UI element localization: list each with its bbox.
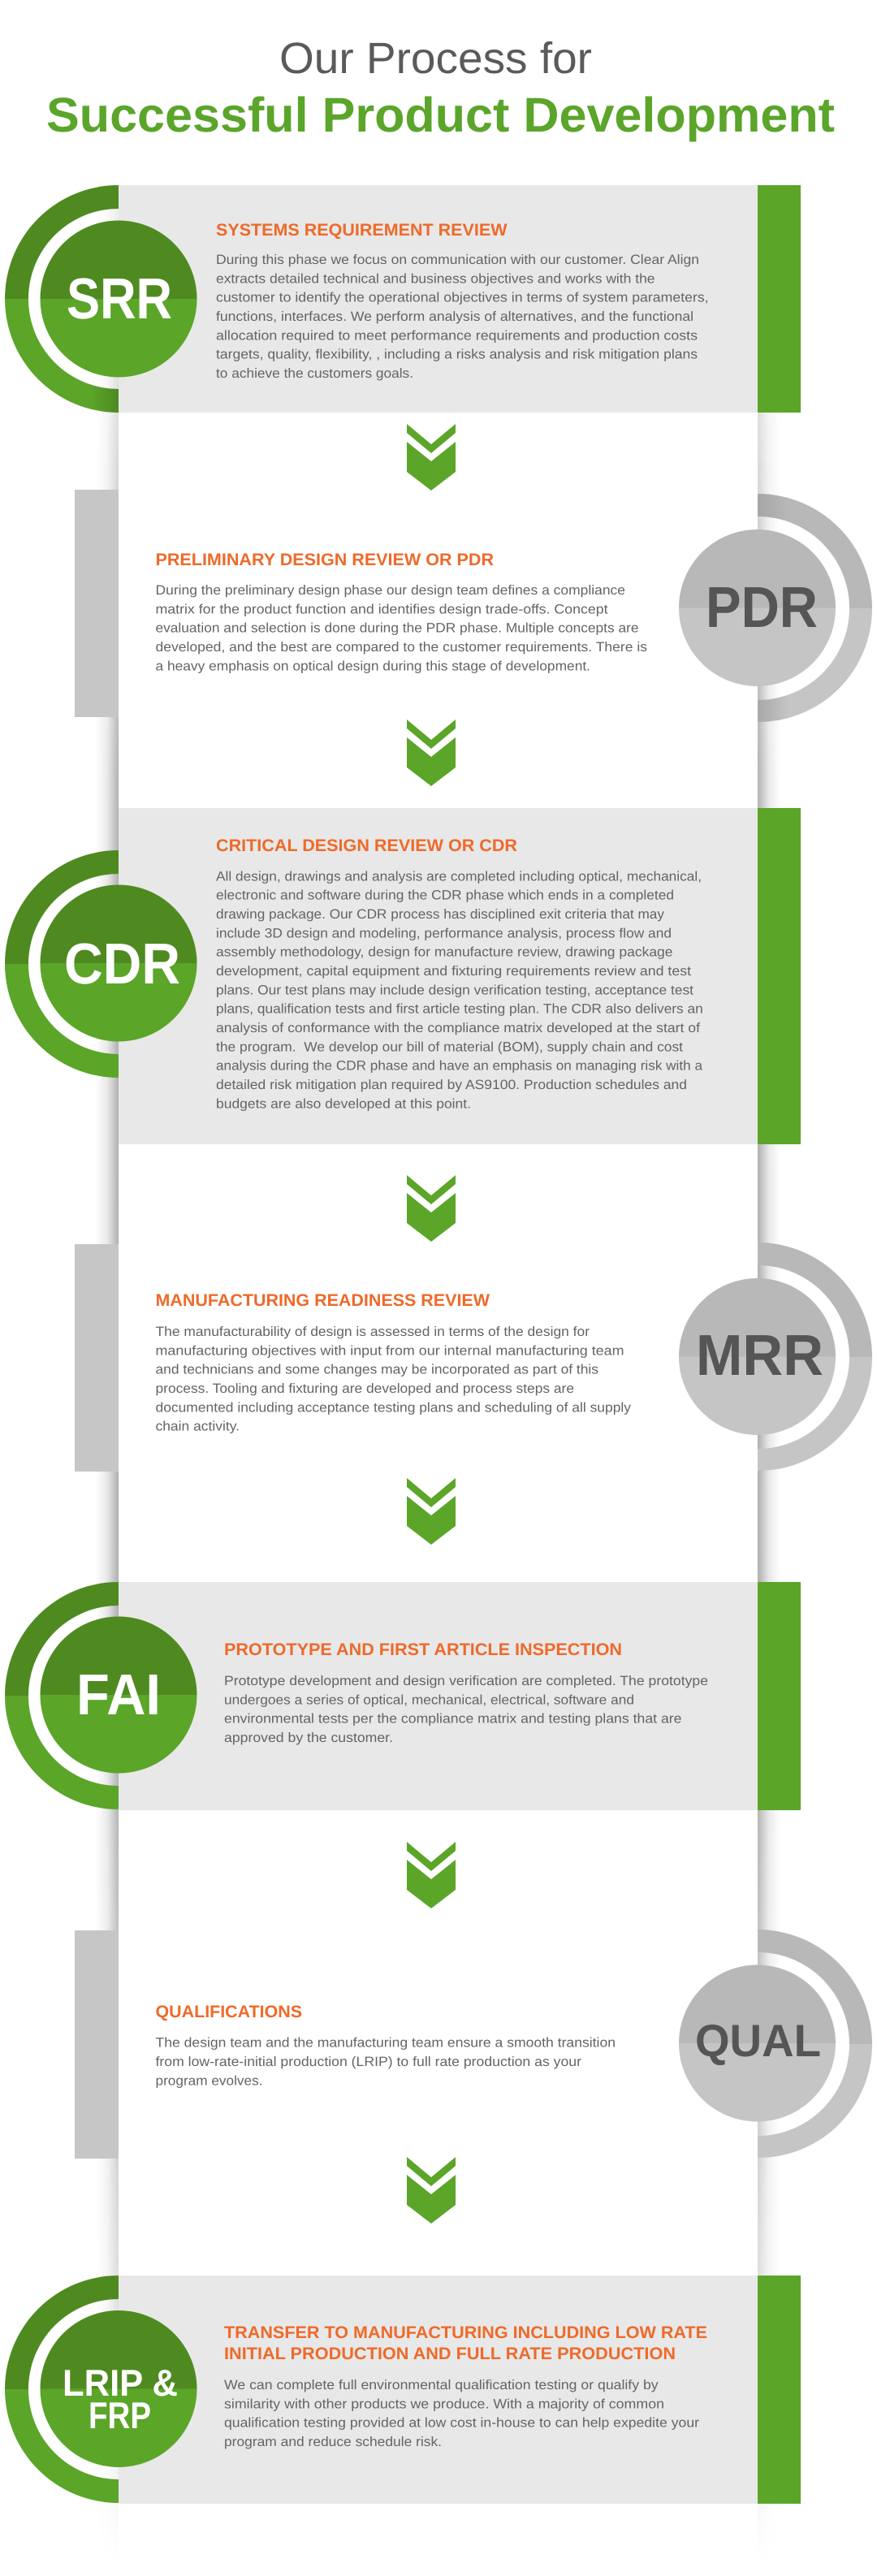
heading: PROTOTYPE AND FIRST ARTICLE INSPECTION (224, 1640, 622, 1659)
arrow: QUAL to LRIP and FRP (407, 2157, 456, 2224)
body text: Prototype development and design verification are completed. The prototype (224, 1674, 708, 1688)
body text: All design, drawings and analysis are completed including optical, mechanical, (216, 869, 702, 884)
body text: allocation required to meet performance requirements and production costs (216, 328, 698, 343)
body text: budgets are also developed at this point. (216, 1096, 471, 1111)
body text: include 3D design and modeling, performance analysis, process flow and (216, 926, 672, 940)
body text: evaluation and selection is done during the PDR phase. Multiple concepts are (156, 621, 638, 636)
body text (216, 869, 703, 1111)
body text: During this phase we focus on communication with our customer. Clear Align (216, 253, 699, 267)
body text (216, 253, 709, 381)
panel: critical design review (41, 808, 801, 1144)
badge: QUAL: QUAL (695, 2015, 821, 2066)
ring: MRR (758, 1243, 872, 1471)
title line: Successful Product Development: Successful Product Development (46, 88, 835, 142)
body text: program evolves. (156, 2073, 263, 2088)
body text: to achieve the customers goals. (216, 366, 413, 381)
body text: extracts detailed technical and business objectives and works with the (216, 271, 655, 286)
badge: LRIP and FRP: FRP (89, 2394, 151, 2436)
heading: PRELIMINARY DESIGN REVIEW OR PDR (156, 551, 494, 569)
ring: CDR (5, 850, 119, 1078)
panel: systems requirement review (41, 185, 801, 413)
accent bar (758, 185, 801, 413)
accent bar (758, 2276, 801, 2504)
body text: analysis during the CDR phase and have an emphasis on managing risk with a (216, 1059, 703, 1074)
body text: process. Tooling and fixturing are developed and process steps are (156, 1381, 574, 1396)
body text: qualification testing provided at low cost in-house to can help expedite your (224, 2416, 700, 2431)
body text: undergoes a series of optical, mechanical, electrical, software and (224, 1692, 634, 1707)
body text (156, 2036, 616, 2088)
body text: plans. Our test plans may include design verification testing, acceptance test (216, 983, 693, 997)
body text: and technicians and some changes may be incorporated as part of this (156, 1363, 598, 1377)
body text: development, capital equipment and fixturing requirements review and test (216, 964, 691, 979)
ring: LRIP and FRP (5, 2276, 119, 2503)
badge: PDR: PDR (706, 576, 818, 640)
heading: MANUFACTURING READINESS REVIEW (156, 1291, 490, 1310)
badge: CDR: CDR (64, 932, 180, 996)
body text: developed, and the best are compared to the customer requirements. There is (156, 640, 647, 655)
accent bar (758, 1582, 801, 1810)
body text: matrix for the product function and identifies design trade-offs. Concept (156, 602, 608, 616)
body text: During the preliminary design phase our design team defines a compliance (156, 583, 625, 598)
panel background (119, 1582, 758, 1810)
body text: documented including acceptance testing plans and scheduling of all supply (156, 1400, 632, 1415)
badge: MRR (679, 1278, 836, 1435)
panel background (119, 2276, 758, 2504)
body text (224, 1674, 708, 1745)
ring: PDR (758, 494, 872, 722)
heading: TRANSFER TO MANUFACTURING INCLUDING LOW RATE (224, 2323, 707, 2342)
body text: targets, quality, flexibility, , including a risks analysis and risk mitigation plans (216, 348, 698, 362)
heading: QUALIFICATIONS (156, 2003, 302, 2021)
body text (156, 583, 647, 673)
body text: detailed risk mitigation plan required by AS9100. Production schedules and (216, 1078, 687, 1092)
body text: customer to identify the operational objectives in terms of system parameters, (216, 291, 709, 305)
body text (156, 1325, 632, 1434)
side bar (75, 1930, 119, 2159)
body text: program and reduce schedule risk. (224, 2435, 442, 2449)
body text: We can complete full environmental qualification testing or qualify by (224, 2378, 659, 2392)
body text: electronic and software during the CDR phase which ends in a completed (216, 888, 674, 903)
ring: QUAL (758, 1930, 872, 2158)
body text: chain activity. (156, 1420, 240, 1434)
arrow: PDR to CDR (407, 720, 456, 786)
column edge shadows (96, 185, 780, 2565)
arrow: CDR to MRR (407, 1175, 456, 1242)
badge: PDR (679, 529, 836, 686)
body text: functions, interfaces. We perform analysis of alternatives, and the functional (216, 309, 693, 324)
badge: SRR: SRR (67, 267, 172, 331)
arrow: MRR to FAI (407, 1478, 456, 1545)
title (46, 34, 835, 142)
heading: INITIAL PRODUCTION AND FULL RATE PRODUCTION (224, 2345, 676, 2363)
panel background (119, 185, 758, 413)
arrow: FAI to QUAL (407, 1842, 456, 1908)
body text: the program. We develop our bill of material (BOM), supply chain and cost (216, 1039, 683, 1054)
side bar (75, 1244, 119, 1472)
body text: manufacturing objectives with input from our internal manufacturing team (156, 1343, 624, 1358)
badge: LRIP and FRP (41, 2310, 197, 2467)
badge: CDR (41, 885, 197, 1041)
body text (224, 2378, 700, 2449)
panel: preliminary design review (75, 490, 836, 717)
panel background (119, 808, 758, 1144)
body text: assembly methodology, design for manufacture review, drawing package (216, 945, 672, 960)
body text: from low-rate-initial production (LRIP) to full rate production as your (156, 2055, 582, 2069)
panel: qualifications (75, 1930, 836, 2159)
badge: QUAL (679, 1965, 836, 2121)
body text: drawing package. Our CDR process has disciplined exit criteria that may (216, 907, 665, 922)
ring: SRR (5, 185, 119, 413)
badge: MRR: MRR (696, 1324, 823, 1388)
badge: FAI: FAI (76, 1663, 161, 1727)
title line: Our Process for: Our Process for (279, 34, 592, 83)
body text: analysis of conformance with the compliance matrix developed at the start of (216, 1021, 700, 1035)
badge: SRR (41, 220, 197, 377)
body text: a heavy emphasis on optical design during this stage of development. (156, 659, 590, 673)
body text: environmental tests per the compliance matrix and testing plans that are (224, 1712, 682, 1727)
panel: manufacturing readiness review (75, 1244, 836, 1472)
body text: The manufacturability of design is assessed in terms of the design for (156, 1325, 590, 1339)
heading: CRITICAL DESIGN REVIEW OR CDR (216, 836, 517, 855)
body text: similarity with other products we produce. With a majority of common (224, 2397, 664, 2411)
body text: The design team and the manufacturing team ensure a smooth transition (156, 2036, 616, 2051)
heading (224, 2323, 707, 2363)
badge: FAI (41, 1616, 197, 1773)
arrow: SRR to PDR (407, 424, 456, 491)
badge: LRIP and FRP: LRIP & (63, 2362, 178, 2404)
heading: SYSTEMS REQUIREMENT REVIEW (216, 221, 508, 240)
side bar (75, 490, 119, 717)
panel: prototype and first article inspection (41, 1582, 801, 1810)
body text: plans, qualification tests and first article testing plan. The CDR also delivers an (216, 1002, 703, 1017)
panel: transfer to manufacturing (41, 2276, 801, 2504)
ring: FAI (5, 1582, 119, 1809)
body text: approved by the customer. (224, 1731, 393, 1745)
accent bar (758, 808, 801, 1144)
